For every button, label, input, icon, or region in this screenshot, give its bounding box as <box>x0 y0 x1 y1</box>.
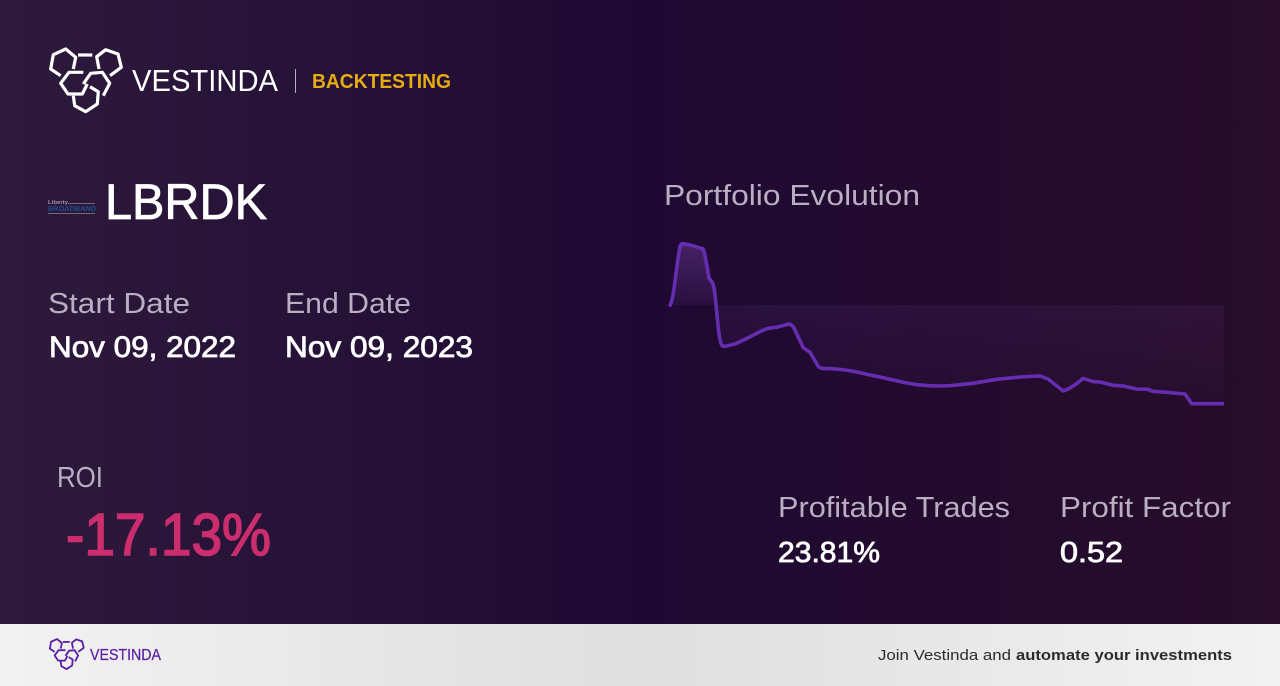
end date: Nov 09, 2023 <box>285 331 473 364</box>
line chart: portfolio evolution <box>670 244 1224 404</box>
chart heading: Portfolio Evolution <box>664 180 920 212</box>
backtesting label: BACKTESTING <box>312 71 451 93</box>
ROI metric: ROI <box>57 462 103 494</box>
ROI metric <box>57 462 271 568</box>
profitable trades metric: 23.81% <box>778 537 880 569</box>
ticker heading: LBRDK <box>105 174 267 230</box>
profitable trades metric <box>778 492 1010 569</box>
profit factor metric: Profit Factor <box>1060 492 1231 524</box>
icon: Liberty Broadband logo: Liberty <box>48 200 69 206</box>
icon: Liberty Broadband logo: BROADBAND <box>48 204 97 213</box>
footer bar <box>0 624 1280 686</box>
end date <box>285 288 473 364</box>
footer wordmark: VESTINDA <box>90 647 162 664</box>
end date: End Date <box>285 288 411 320</box>
header divider <box>295 69 296 93</box>
logo wordmark: VESTINDA <box>132 63 278 98</box>
icon: Liberty Broadband logo <box>48 200 97 214</box>
footer call to action: automate your investments <box>1016 647 1232 664</box>
start date: Nov 09, 2022 <box>49 331 236 364</box>
start date <box>48 288 236 364</box>
start date: Start Date <box>48 288 190 320</box>
footer logo icon <box>50 639 84 669</box>
logo: Vestinda hexagons <box>51 49 121 112</box>
footer call to action: Join Vestinda and <box>878 647 1011 664</box>
profitable trades metric: Profitable Trades <box>778 492 1010 524</box>
profit factor metric <box>1060 492 1231 569</box>
ROI metric: -17.13% <box>66 502 271 568</box>
profit factor metric: 0.52 <box>1060 537 1123 569</box>
